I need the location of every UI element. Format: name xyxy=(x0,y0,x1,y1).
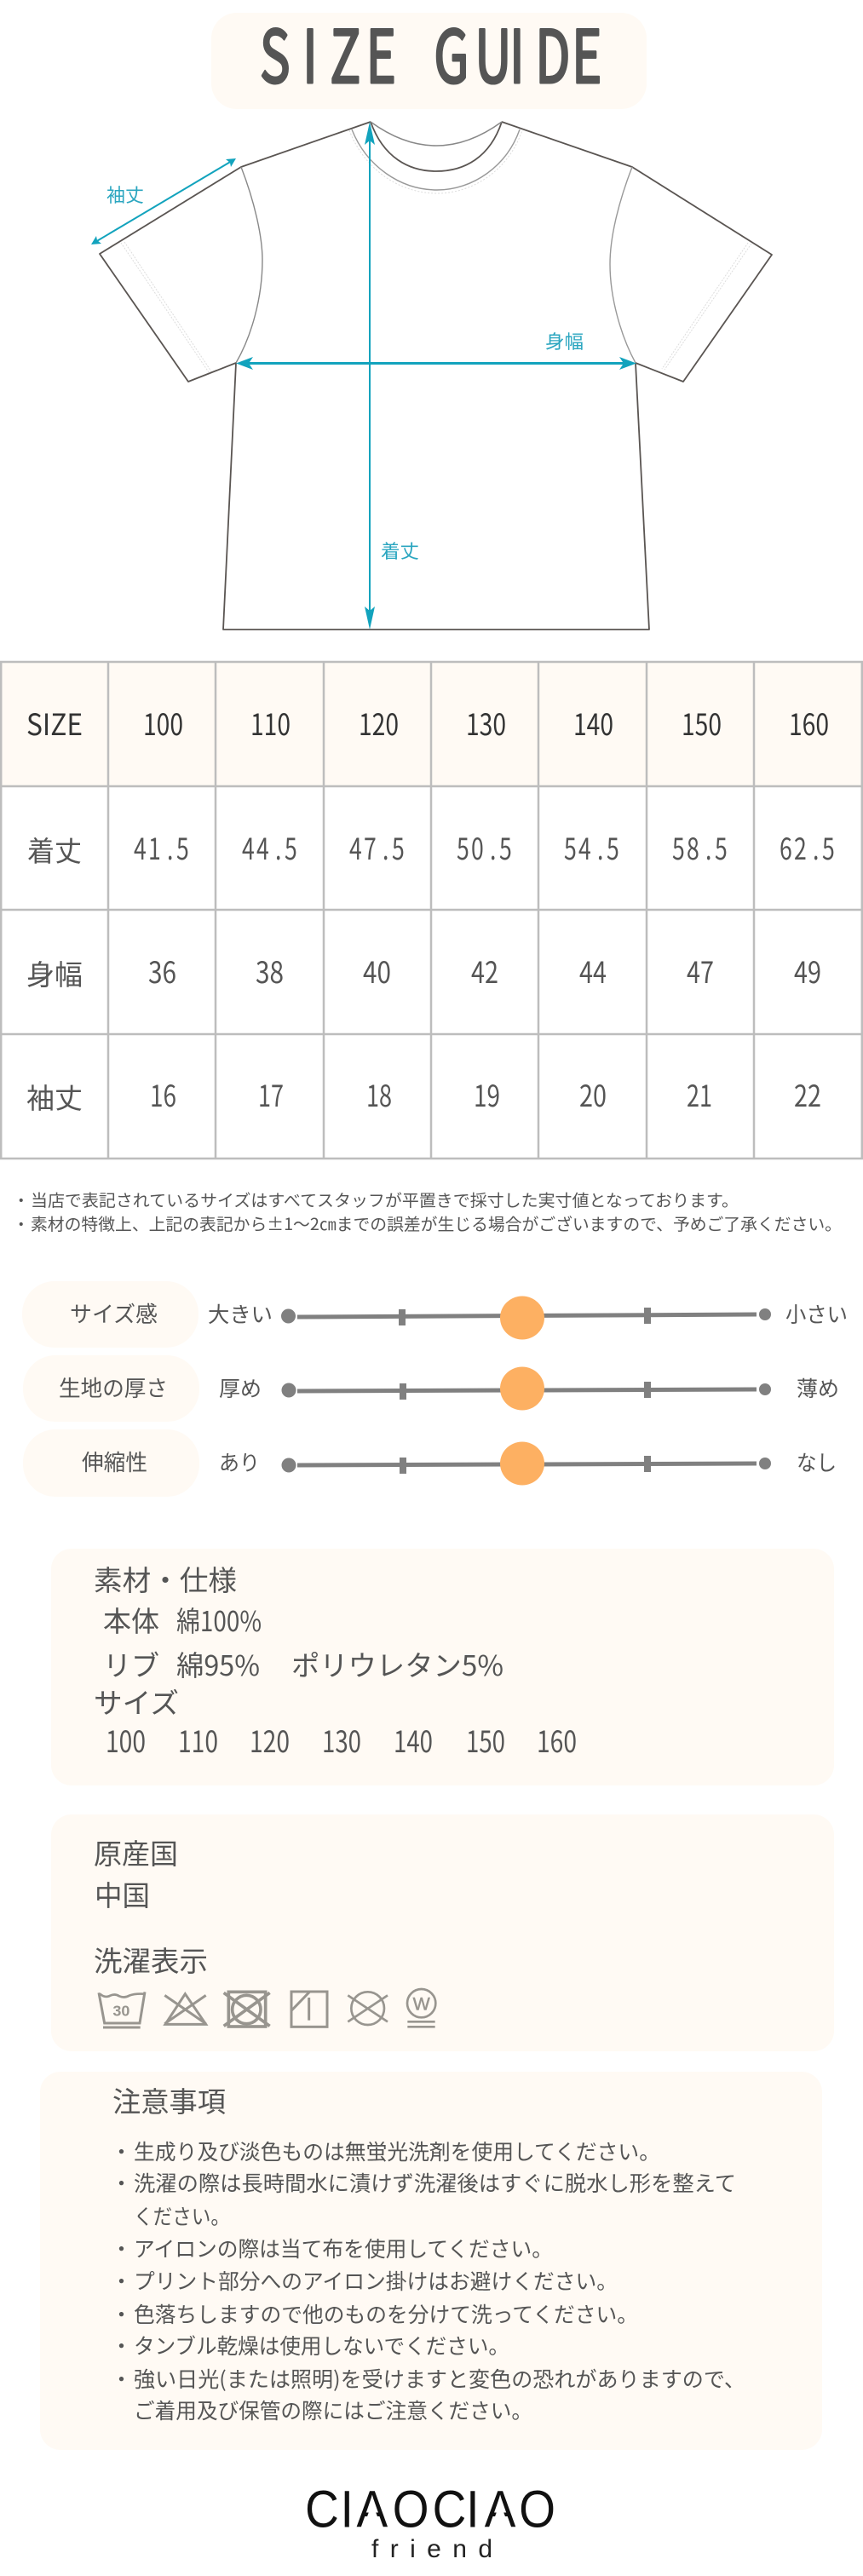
size list: 100 xyxy=(106,1718,146,1762)
table row: sleeve length: 17 xyxy=(258,1072,284,1116)
icon: wash 30: 30 xyxy=(112,2003,129,2020)
icon: no dry clean xyxy=(348,1992,388,2025)
care heading: 洗濯表示 xyxy=(94,1939,208,1980)
cautions list: 洗濯の際は長時間水に漬けず洗濯後はすぐに脱水し形を整えて xyxy=(134,2167,736,2198)
rating: stretch: 伸縮性 xyxy=(82,1446,147,1477)
cautions list: ・ xyxy=(111,2136,132,2166)
arrow: length xyxy=(365,122,375,630)
table row: sleeve length: 21 xyxy=(687,1072,712,1116)
cautions list: 生成り及び淡色ものは無蛍光洗剤を使用してください。 xyxy=(134,2136,660,2166)
label: length: 着丈 xyxy=(381,537,419,564)
logo: CIAOCIAO friend: friend xyxy=(371,2535,492,2563)
t-shirt measurement diagram xyxy=(91,122,772,630)
cautions list: ・ xyxy=(111,2167,132,2198)
table row: sleeve length: 袖丈 xyxy=(26,1076,83,1117)
material: body xyxy=(103,1599,262,1640)
table row: chest width: 44 xyxy=(579,949,607,992)
panel: cautions xyxy=(40,2072,822,2450)
material: rib: 綿95% xyxy=(176,1643,260,1684)
icon: wet clean: W xyxy=(413,1993,431,2014)
cautions list: ・ xyxy=(111,2265,132,2296)
table header row: 150 xyxy=(682,701,722,745)
table header row: 130 xyxy=(466,701,506,745)
cautions list: ・ xyxy=(111,2330,132,2360)
rating: stretch: なし xyxy=(797,1446,837,1477)
table row: chest width xyxy=(26,949,821,993)
material: rib xyxy=(103,1643,503,1684)
table row: length: 54.5 xyxy=(564,825,619,868)
table row: sleeve length: 18 xyxy=(366,1072,392,1116)
icon: no tumble dry xyxy=(224,1992,270,2027)
table row: chest width: 38 xyxy=(256,949,284,992)
cautions list: プリント部分へのアイロン掛けはお避けください。 xyxy=(134,2265,618,2296)
icon: line dry in shade xyxy=(291,1992,327,2027)
table row: length: 50.5 xyxy=(457,825,512,868)
panel: material and sizes xyxy=(51,1549,834,1785)
table row: length: 58.5 xyxy=(672,825,728,868)
size list: 140 xyxy=(394,1718,433,1762)
cautions list: 色落ちしますので他のものを分けて洗ってください。 xyxy=(134,2298,638,2329)
table row: chest width: 40 xyxy=(363,949,391,992)
origin heading: 原産国 xyxy=(94,1831,178,1872)
cautions list: タンブル乾燥は使用しないでください。 xyxy=(134,2330,509,2360)
sizes heading: サイズ xyxy=(94,1681,179,1722)
rating: size feel: 小さい xyxy=(785,1298,848,1329)
cautions list: ご着用及び保管の際にはご注意ください。 xyxy=(134,2395,532,2425)
table header row: 160 xyxy=(789,701,829,745)
cautions list: ください。 xyxy=(134,2200,230,2231)
size table xyxy=(0,662,863,1159)
logo: CIAOCIAO friend: CIAOCIAO xyxy=(305,2481,555,2539)
rating: fabric thickness: 薄め xyxy=(797,1372,839,1403)
size list: 130 xyxy=(322,1718,361,1762)
cautions list: ・ xyxy=(111,2363,132,2394)
label: sleeve length: 袖丈 xyxy=(106,181,144,208)
cautions list: アイロンの際は当て布を使用してください。 xyxy=(134,2233,553,2263)
table row: chest width: 36 xyxy=(148,949,176,992)
table header row xyxy=(26,701,829,745)
table row: sleeve length xyxy=(26,1072,821,1117)
table header row: 100 xyxy=(143,701,183,745)
origin value: 中国 xyxy=(95,1873,150,1914)
rating: size feel: 大きい xyxy=(208,1298,273,1329)
size list: 150 xyxy=(466,1718,505,1762)
panel: origin and care xyxy=(51,1814,834,2051)
size list: 110 xyxy=(178,1718,218,1762)
table row: length: 着丈 xyxy=(27,829,82,870)
rating: size feel: サイズ感 xyxy=(70,1297,158,1329)
icon: wet clean xyxy=(407,1989,435,2027)
rating: stretch xyxy=(23,1429,837,1497)
material: body: 綿100% xyxy=(176,1599,262,1640)
table row: length: 41.5 xyxy=(134,825,189,868)
cautions heading: 注意事項 xyxy=(112,2079,226,2120)
size list: 160 xyxy=(537,1718,577,1762)
table header row: 120 xyxy=(359,701,399,745)
table header row: 140 xyxy=(573,701,613,745)
rating: size feel xyxy=(22,1281,848,1348)
material: rib: リブ xyxy=(103,1643,159,1684)
t-shirt outline xyxy=(100,122,772,630)
table row: sleeve length: 19 xyxy=(474,1072,500,1116)
table row: chest width: 42 xyxy=(471,949,498,992)
cautions list xyxy=(111,2136,745,2425)
material: body: 本体 xyxy=(103,1599,159,1640)
arrow: chest width xyxy=(236,357,636,370)
title: SIZE GUIDE: SIZEGUIDE xyxy=(260,0,601,104)
measurement notes: 当店で表記されているサイズはすべてスタッフが平置きで採寸した実寸値となっております。 xyxy=(31,1187,739,1211)
table row: length: 47.5 xyxy=(349,825,405,868)
cautions list: ・ xyxy=(111,2233,132,2263)
arrow: sleeve length xyxy=(91,158,236,244)
measurement notes: 素材の特徴上、上記の表記から±1～2㎝までの誤差が生じる場合がございますので、予めご了承ください。 xyxy=(31,1210,842,1235)
table row: chest width: 47 xyxy=(687,949,714,992)
table header row: 110 xyxy=(250,701,291,745)
table row: length: 62.5 xyxy=(780,825,835,868)
measurement notes xyxy=(13,1187,842,1235)
table row: length: 44.5 xyxy=(242,825,297,868)
material: rib: ポリウレタン5% xyxy=(291,1643,503,1684)
table row: chest width: 49 xyxy=(794,949,821,992)
material heading: 素材・仕様 xyxy=(94,1558,237,1599)
icon: wash 30 xyxy=(99,1992,145,2027)
icon: no bleach xyxy=(164,1994,206,2024)
size list: 120 xyxy=(250,1718,290,1762)
table row: sleeve length: 16 xyxy=(150,1072,176,1116)
rating: fabric thickness: 厚め xyxy=(219,1372,262,1403)
size list xyxy=(106,1718,577,1762)
measurement notes: ・ xyxy=(13,1187,30,1211)
table header row: SIZE xyxy=(26,701,83,745)
rating: fabric thickness xyxy=(23,1355,839,1422)
rating: stretch: あり xyxy=(219,1446,260,1477)
cautions list: 強い日光(または照明)を受けますと変色の恐れがありますので、 xyxy=(134,2363,745,2394)
label: chest width: 身幅 xyxy=(545,327,584,354)
table row: chest width: 身幅 xyxy=(26,952,83,993)
table row: sleeve length: 22 xyxy=(794,1072,821,1116)
table row: sleeve length: 20 xyxy=(579,1072,607,1116)
measurement notes: ・ xyxy=(13,1210,30,1235)
rating: fabric thickness: 生地の厚さ xyxy=(59,1371,168,1403)
cautions list: ・ xyxy=(111,2298,132,2329)
table row: length xyxy=(27,825,835,870)
care icons xyxy=(99,1989,435,2027)
